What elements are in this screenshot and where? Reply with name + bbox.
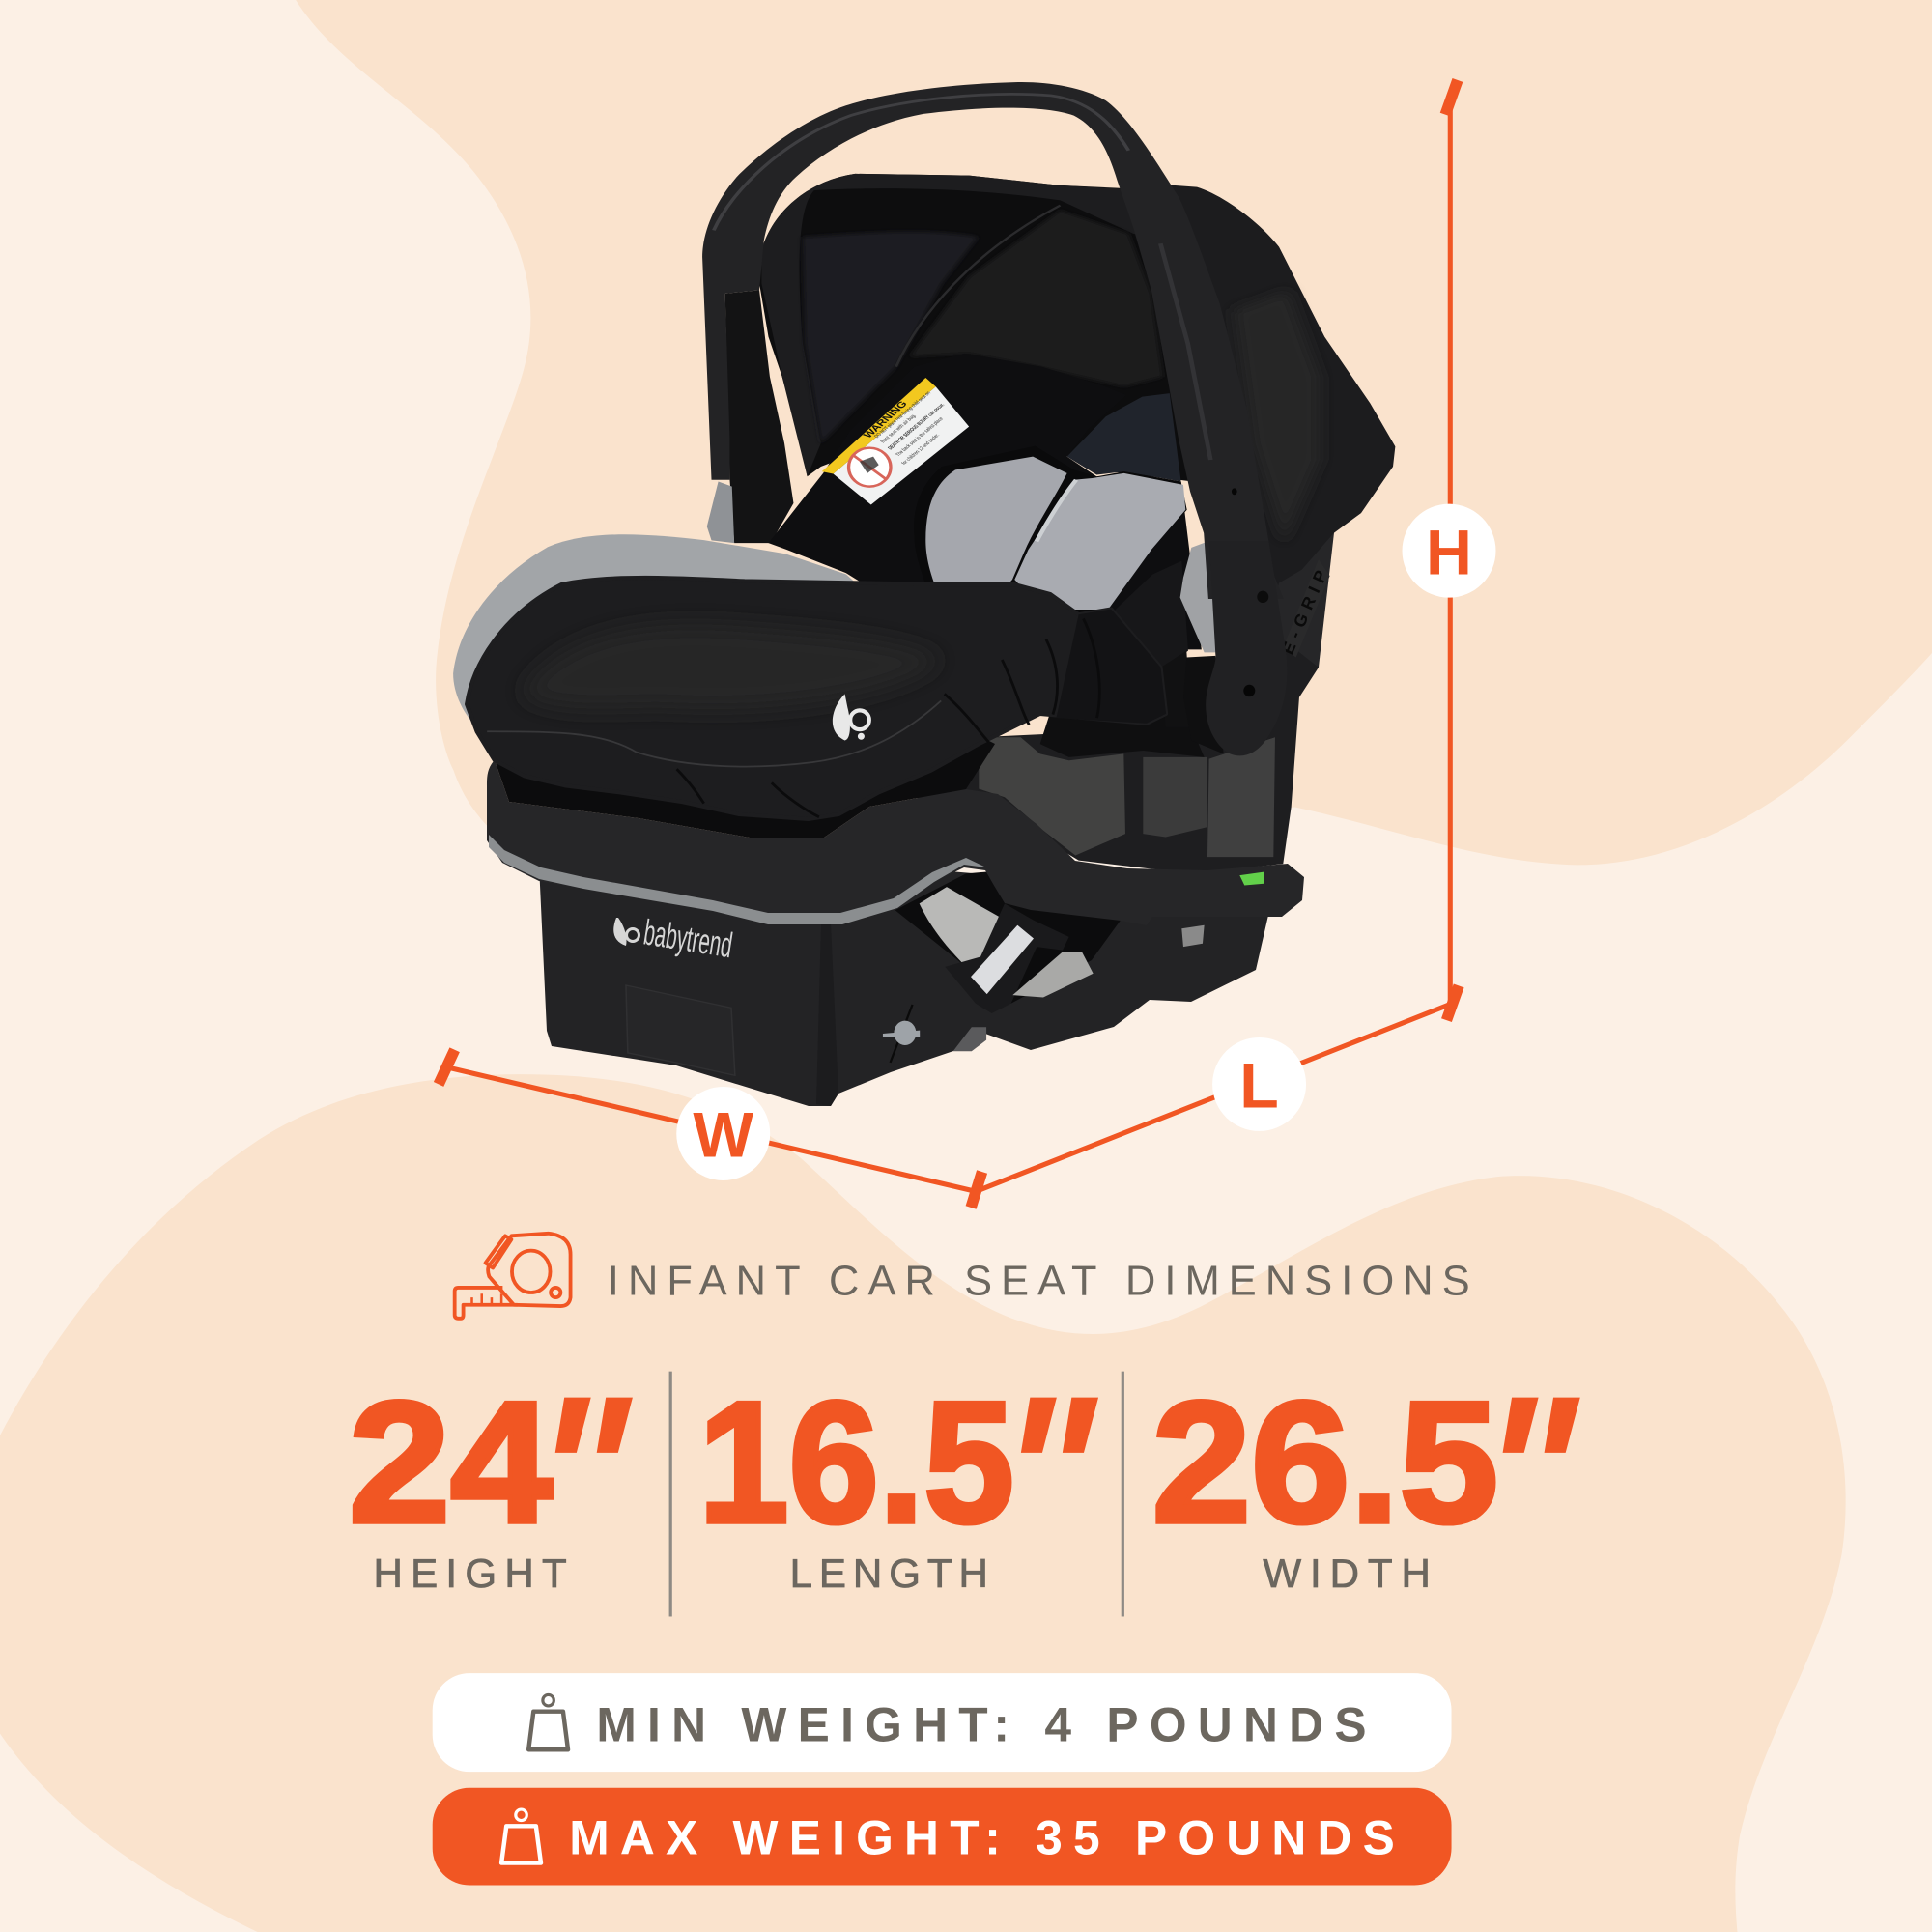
- E-GRIP panel: [1283, 559, 1330, 658]
- grey latch: [1181, 925, 1205, 947]
- shell panel two: [1143, 757, 1208, 838]
- warning word: WARNING: [862, 400, 910, 440]
- stat: width: [1152, 1350, 1604, 1597]
- icon: weight: [528, 1694, 568, 1749]
- shell body: [918, 640, 1319, 873]
- canopy seam: [896, 206, 1061, 367]
- blue-grey seat back: [1067, 393, 1181, 481]
- handle highlight: [714, 94, 1128, 230]
- right side cushion and grey handle tab: [1114, 541, 1224, 753]
- seat cushions: [707, 354, 1202, 649]
- level indicator: [1239, 872, 1264, 885]
- grey pad centre: [1014, 473, 1185, 610]
- base brand logo: [613, 912, 735, 965]
- webbing: [920, 887, 1011, 967]
- shadow below footmuff: [495, 734, 995, 838]
- width dimension line: [439, 1050, 976, 1191]
- inch mark: ": [1456, 1350, 1604, 1597]
- length dimension line: [971, 1005, 1450, 1208]
- icon: tape measure: [455, 1234, 571, 1319]
- background blob: top: [296, 0, 1932, 865]
- yellow band: [822, 378, 936, 474]
- divider: [669, 1372, 672, 1616]
- shell panel one: [979, 737, 1125, 855]
- base box: [539, 865, 1272, 1106]
- black cushion: [769, 354, 1202, 649]
- shell behind canopy: [1256, 527, 1335, 681]
- inch mark: ": [509, 1350, 656, 1597]
- base rim: [487, 760, 1304, 925]
- stat: length: 16.5: [698, 1365, 1014, 1558]
- height dimension line: [1445, 80, 1459, 1020]
- footmuff grey rim: [453, 534, 880, 731]
- stat: height: 24: [349, 1365, 552, 1558]
- pivot pin: [1232, 488, 1237, 495]
- footmuff sheen: [521, 624, 941, 709]
- min weight text: MIN WEIGHT: 4 POUNDS: [596, 1697, 1367, 1751]
- warning fine print: [873, 391, 947, 466]
- warning fine print: for children 12 and under.: [901, 433, 942, 466]
- level dial: [883, 1021, 920, 1045]
- heading: INFANT CAR SEAT DIMENSIONS: [608, 1259, 1470, 1305]
- no airbag symbol: [849, 448, 891, 487]
- base corner shadow: [816, 923, 838, 1106]
- max weight text: MAX WEIGHT: 35 POUNDS: [569, 1811, 1395, 1865]
- lower dark cavity: [895, 870, 1121, 1004]
- pad seam highlight: [1037, 480, 1076, 541]
- handle lower sheen: [1160, 243, 1210, 460]
- footmuff: [453, 534, 1166, 819]
- footmuff logo: [833, 694, 869, 740]
- H badge: H: [1426, 517, 1472, 588]
- buckle frame: [945, 903, 1069, 1013]
- L badge: L: [1239, 1051, 1279, 1122]
- hub screw: [1257, 591, 1268, 603]
- W badge: W: [693, 1100, 753, 1172]
- warning fine print: front seat with air bag.: [880, 413, 918, 444]
- warning fine print: DO NOT place rear-facing child seat on: [873, 391, 932, 440]
- H badge: [1403, 504, 1495, 598]
- dial slot: [891, 1005, 913, 1063]
- stat: width: 26.5: [1152, 1365, 1498, 1558]
- infant car seat photo illustration: [453, 82, 1395, 1106]
- under-seat frame: [1040, 714, 1205, 757]
- inch mark: ": [975, 1350, 1122, 1597]
- cushion side: [1114, 561, 1188, 670]
- grey pad left: [925, 457, 1067, 596]
- canopy outer: [1128, 182, 1395, 599]
- canopy rim band: [761, 174, 1151, 476]
- footmuff gather folds: [677, 618, 1099, 817]
- W badge: [676, 1087, 770, 1180]
- cushion side band: [1161, 651, 1191, 727]
- hub hole: [1243, 685, 1255, 696]
- warning label: [822, 378, 969, 505]
- L badge: [1212, 1037, 1306, 1131]
- upper seat rear parts: [725, 174, 1395, 599]
- min weight pill: [433, 1673, 1452, 1772]
- carry handle: [702, 82, 1284, 599]
- shell panel three: [1208, 737, 1275, 857]
- bottom wedge: [953, 1027, 986, 1051]
- divider: [1122, 1372, 1124, 1616]
- E-GRIP label: E-GRIP: [1278, 567, 1331, 657]
- warning fine print: DEATH OR SERIOUS INJURY can occur.: [888, 403, 947, 451]
- length label: LENGTH: [790, 1550, 988, 1596]
- grey arm joint: [707, 481, 734, 543]
- background blob: bottom: [0, 1074, 1846, 1932]
- width label: WIDTH: [1263, 1550, 1431, 1596]
- canopy outer sheen: [1234, 290, 1321, 543]
- arm recess: [725, 290, 793, 543]
- grey tab: [1180, 541, 1217, 652]
- ribbed tongue: [1012, 952, 1094, 998]
- grey rim stripe: [489, 835, 986, 924]
- embossed panel: [626, 985, 986, 1075]
- handle hub: [1206, 541, 1287, 755]
- max weight pill: [433, 1788, 1452, 1886]
- stat: height: [349, 1350, 656, 1597]
- canopy left panel: [803, 232, 979, 443]
- icon: weight: [501, 1809, 541, 1863]
- brand name: babytrend: [641, 912, 735, 965]
- footmuff stitching: [487, 700, 941, 767]
- warning fine print: The back seat is the safest place: [895, 416, 945, 458]
- rear shell: [918, 559, 1331, 873]
- hub collar: [1183, 656, 1224, 753]
- seat pad border: [914, 446, 1187, 616]
- canopy interior: [759, 174, 1207, 483]
- belt and buckle: [895, 870, 1205, 1013]
- stat: length: [698, 1350, 1122, 1597]
- height label: HEIGHT: [373, 1550, 567, 1596]
- rear gathered section: [1056, 610, 1166, 724]
- footmuff black cover: [467, 578, 1166, 819]
- canopy right panel: [910, 211, 1163, 386]
- buckle white bar: [971, 925, 1034, 994]
